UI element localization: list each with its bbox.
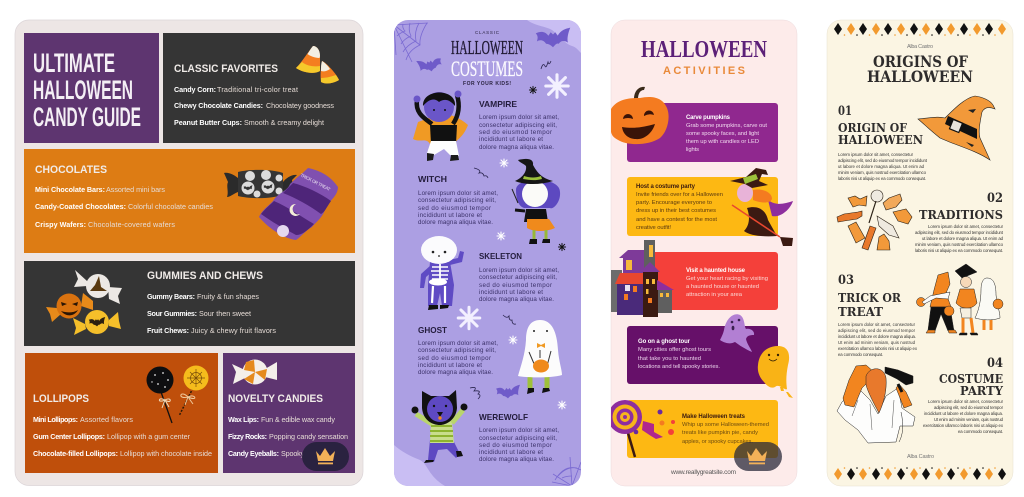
section 04: PARTY <box>960 383 1004 398</box>
section 03: ea commodo consequat. <box>838 352 883 357</box>
entry: ghost text: sed do eiusmod tempor <box>418 355 491 362</box>
section 01: laboris nisi ut aliquip ex ea commodo consequat. <box>838 176 926 181</box>
section: gummies and chews: Fruity & fun shapes <box>197 292 259 301</box>
section: chocolates: Crispy Wafers: <box>35 220 86 229</box>
section: lollipops: Chocolate-filled Lollipops: <box>33 449 118 458</box>
section 04: 04 <box>987 356 1003 371</box>
section: lollipops: Lollipop with a gum center <box>107 432 191 441</box>
entry: witch text: Lorem ipsum dolor sit amet, <box>418 190 498 197</box>
section 04: exercitation ullamco laboris nisi ut aliquip ex <box>923 423 1004 428</box>
entry: ghost text: consectetur adipiscing elit, <box>418 347 496 354</box>
icon: yellow ghost <box>758 346 793 398</box>
section: chocolates: Assorted mini bars <box>106 185 165 194</box>
heading: HALLOWEEN <box>641 37 768 63</box>
section: chocolates: CHOCOLATES <box>35 164 107 176</box>
activity: haunted house: Visit a haunted house <box>686 268 746 274</box>
decorative blobs <box>394 20 581 486</box>
activity: haunted house: attraction in your area <box>686 292 743 298</box>
entry: werewolf text: Lorem ipsum dolor sit amet, <box>479 427 559 434</box>
activity: halloween treats <box>608 400 778 458</box>
section: classic favorites: Candy Corn: <box>174 85 216 94</box>
section 03: incididunt ut labore et dolore magna aliqua. <box>838 334 916 339</box>
section 03: TRICK OR <box>838 290 902 305</box>
entry: witch text: sed do eiusmod tempor <box>418 205 491 212</box>
heading: COSTUMES <box>451 56 523 81</box>
section: lollipops: Assorted flavors <box>80 415 133 424</box>
section 02: laboris nisi ut aliquip ex ea commodo consequat. <box>915 248 1003 253</box>
section: chocolates: Candy-Coated Chocolates: <box>35 202 126 211</box>
heading: ACTIVITIES <box>663 65 745 77</box>
entry: vampire text: sed do eiusmod tempor <box>479 129 552 136</box>
icon: lollipops <box>146 366 208 423</box>
illustration: ghost <box>518 320 562 394</box>
activity: carve pumpkins: lights <box>686 147 699 153</box>
section: lollipops: Lollipop with chocolate inside <box>120 449 212 458</box>
activity: ghost tour: Go on a ghost tour <box>638 339 691 345</box>
entry: vampire text: consectetur adipiscing elit, <box>479 122 557 129</box>
entry: witch text: WITCH <box>418 174 447 184</box>
section 04: incididunt ut labore et dolore magna aliqua. <box>924 411 1003 416</box>
activity: costume party <box>627 168 793 246</box>
title block: HALLOWEEN <box>33 75 133 105</box>
heading <box>641 37 768 77</box>
section: classic favorites: Smooth & creamy delight <box>244 118 324 127</box>
panel: halloween activities <box>608 20 797 486</box>
heading <box>451 30 523 87</box>
section 01: HALLOWEEN <box>838 132 923 147</box>
badge: crown <box>302 442 349 471</box>
entry: werewolf text: sed do eiusmod tempor <box>479 442 552 449</box>
entry: ghost text <box>418 325 498 376</box>
entry: witch text: consectetur adipiscing elit, <box>418 197 496 204</box>
entry: skeleton text <box>479 251 559 303</box>
section 03: 03 <box>838 273 854 288</box>
illustration: witch <box>512 159 560 244</box>
activity: ghost tour: locations and tell spooky stories. <box>638 364 720 370</box>
section 03: adipiscing elit, sed do eiusmod tempor <box>838 328 916 333</box>
activity: carve pumpkins: Carve pumpkins <box>686 115 731 121</box>
panel: halloween costumes <box>394 20 581 486</box>
title block: CANDY GUIDE <box>33 102 141 132</box>
section: novelty candies: Wax Lips: <box>228 415 259 424</box>
activity: ghost tour: that take you to haunted <box>638 356 701 362</box>
section 03: Lorem ipsum dolor sit amet, consectetur <box>838 322 916 327</box>
heading: CLASSIC <box>475 30 500 35</box>
illustration: vampire <box>413 90 468 161</box>
section: gummies and chews: Sour Gummies: <box>147 309 197 318</box>
icon: witch hat <box>918 96 995 160</box>
activity: costume party: Invite friends over for a Halloween <box>636 192 723 198</box>
icon: lollipop and sweets <box>608 400 675 457</box>
icon: spider web top <box>394 23 428 62</box>
heading: FOR YOUR KIDS! <box>463 81 511 87</box>
section 01: 01 <box>838 104 852 119</box>
activity: carve pumpkins: some spooky faces, and light <box>686 131 759 137</box>
section: novelty candies: Popping candy sensation <box>269 432 348 441</box>
activity: costume party: Host a costume party <box>636 184 696 190</box>
activity: costume party: party. Encourage everyone to <box>636 200 712 206</box>
panel: ultimate halloween candy guide <box>15 20 363 486</box>
activity: halloween treats: Make Halloween treats <box>682 414 746 420</box>
entry: skeleton text: dolore magna aliqua vitae. <box>479 296 554 303</box>
section: classic favorites: CLASSIC FAVORITES <box>174 63 278 75</box>
entry: werewolf text: WEREWOLF <box>479 412 528 422</box>
activity: carve pumpkins <box>611 87 778 162</box>
entry: vampire text: VAMPIRE <box>479 99 517 109</box>
section: novelty candies: Spooky & fun treats <box>281 449 341 458</box>
section: classic favorites: Traditional tri-color treat <box>217 85 298 94</box>
section: chocolates <box>24 149 355 253</box>
section: chocolates: Colorful chocolate candies <box>128 202 213 211</box>
panel: origins of halloween <box>827 20 1013 486</box>
icon: purple striped candy <box>259 168 338 240</box>
section 02: 02 <box>987 191 1003 206</box>
icon: spider web bottom <box>552 457 581 486</box>
section: gummies and chews: GUMMIES AND CHEWS <box>147 270 263 282</box>
section 01: adipiscing elit, sed do eiusmod tempor incididunt <box>838 158 928 163</box>
pattern: top diamonds <box>834 23 1006 36</box>
badge: crown <box>734 442 782 471</box>
section: chocolates: Mini Chocolate Bars: <box>35 185 105 194</box>
entry: vampire text: incididunt ut labore et <box>479 136 543 143</box>
section 03: exercitation ullamco laboris nisi ut aliquip ex <box>838 346 918 351</box>
section 01: ORIGIN OF <box>838 120 907 135</box>
section: classic favorites: Peanut Butter Cups: <box>174 118 242 127</box>
entry: skeleton text: consectetur adipiscing elit, <box>479 274 557 281</box>
icon: swirl candy <box>232 360 277 384</box>
section 02 <box>915 191 1004 253</box>
heading: HALLOWEEN <box>451 37 523 59</box>
decorations: stars and squiggles <box>458 61 568 409</box>
section: novelty candies: Candy Eyeballs: <box>228 449 279 458</box>
activity: costume party: and have a contest for the most <box>636 217 717 223</box>
activity: costume party: creative outfit! <box>636 225 671 231</box>
activity: carve pumpkins: Grab some pumpkins, carve out <box>686 123 767 129</box>
section: classic favorites: Chewy Chocolate Candies: <box>174 101 263 110</box>
section 01 <box>838 104 928 181</box>
section 01: minim veniam, quis nostrud exercitation ullamco <box>838 170 927 175</box>
illustration: man with hair dryer <box>837 365 915 443</box>
entry: skeleton text: sed do eiusmod tempor <box>479 282 552 289</box>
section 04: ea commodo consequat. <box>958 429 1003 434</box>
icon: pumpkin <box>611 87 669 144</box>
entry: vampire text <box>479 99 559 151</box>
entry: werewolf text: dolore magna aliqua vitae. <box>479 456 554 463</box>
section: gummies and chews: Juicy & chewy fruit flavors <box>191 326 276 335</box>
activity: costume party: dress up in their best costumes <box>636 208 716 214</box>
section 04: Lorem ipsum dolor sit amet, consectetur <box>928 399 1004 404</box>
pattern: bottom diamonds <box>834 467 1006 480</box>
heading <box>867 52 973 86</box>
section 02: adipiscing elit, sed do eiusmod tempor incididunt <box>915 230 1004 235</box>
entry: skeleton text: incididunt ut labore et <box>479 289 543 296</box>
icon: bats <box>416 28 570 398</box>
section 02: minim veniam, quis nostrud exercitation ullamco <box>915 242 1004 247</box>
icon: candy pile <box>837 190 912 250</box>
entry: vampire text: dolore magna aliqua vitae. <box>479 144 554 151</box>
section: lollipops: Gum Center Lollipops: <box>33 432 105 441</box>
entry: werewolf text <box>479 412 559 463</box>
activity: haunted house: a haunted house or haunted <box>686 284 759 290</box>
illustration: werewolf <box>412 390 468 463</box>
entry: ghost text: incididunt ut labore et <box>418 362 482 369</box>
section 02: TRADITIONS <box>919 207 1003 222</box>
entry: vampire text: Lorem ipsum dolor sit amet, <box>479 114 559 121</box>
section: gummies and chews <box>24 261 355 346</box>
entry: werewolf text: incididunt ut labore et <box>479 449 543 456</box>
activity: haunted house <box>611 240 778 317</box>
section: classic favorites: Chocolatey goodness <box>266 101 334 110</box>
activity: haunted house: Get your heart racing by visiting <box>686 276 768 282</box>
entry: ghost text: Lorem ipsum dolor sit amet, <box>418 340 498 347</box>
heading: HALLOWEEN <box>867 67 973 86</box>
activity: halloween treats: apples, or spooky cupcakes. <box>682 439 753 445</box>
icon: three halloween candies <box>46 270 122 335</box>
section: gummies and chews: Fruit Chews: <box>147 326 189 335</box>
activity: carve pumpkins: them up with candles or LED <box>686 139 759 145</box>
section 02: ut labore et dolore magna aliqua. Ut enim ad <box>922 236 1004 241</box>
entry: witch text: dolore magna aliqua vitae. <box>418 219 493 226</box>
section: gummies and chews: Sour then sweet <box>199 309 251 318</box>
icon: haunted house <box>611 240 674 317</box>
section 04: COSTUME <box>939 371 1003 386</box>
icon: candy corn <box>296 46 339 83</box>
entry: ghost text: dolore magna aliqua vitae. <box>418 369 493 376</box>
icon: flying witch <box>730 168 793 246</box>
activity: halloween treats: treats like pumpkin pie, candy <box>682 430 758 436</box>
section: novelty candies <box>223 353 355 473</box>
author: Alba Castro <box>907 44 933 50</box>
title block: ULTIMATE <box>33 48 115 78</box>
icon: purple striped candy: TRICK OR TREAT <box>300 172 331 192</box>
section: lollipops: LOLLIPOPS <box>33 393 89 405</box>
section: lollipops <box>25 353 218 473</box>
section 01: Lorem ipsum dolor sit amet, consectetur <box>838 152 914 157</box>
section 04: Ut enim ad minim veniam, quis nostrud <box>934 417 1004 422</box>
section: gummies and chews: Gummy Bears: <box>147 292 195 301</box>
entry: werewolf text: consectetur adipiscing elit, <box>479 435 557 442</box>
section: novelty candies: NOVELTY CANDIES <box>228 393 323 405</box>
section 02: Lorem ipsum dolor sit amet, consectetur <box>928 224 1004 229</box>
entry: ghost text: GHOST <box>418 325 448 335</box>
section 04 <box>923 356 1004 434</box>
activity: ghost tour <box>627 314 793 398</box>
section 04: adipiscing elit, sed do eiusmod tempor <box>934 405 1004 410</box>
section: classic favorites <box>163 33 355 143</box>
section 03 <box>838 273 918 357</box>
author: Alba Castro <box>907 454 934 460</box>
icon: wrapped bat candy <box>224 170 297 198</box>
section: novelty candies: Fizzy Rocks: <box>228 432 267 441</box>
illustration: skeleton <box>420 236 464 310</box>
entry: witch text <box>418 174 498 226</box>
website: www.reallygreatsite.com <box>670 469 736 476</box>
section: novelty candies: Fun & edible wax candy <box>261 415 335 424</box>
section 03: TREAT <box>838 304 884 319</box>
activity: halloween treats: Whip up some Halloween-themed <box>682 422 769 428</box>
entry: skeleton text: Lorem ipsum dolor sit amet, <box>479 267 559 274</box>
illustration: trick or treaters <box>916 264 1003 335</box>
title block <box>24 33 159 143</box>
heading: ORIGINS OF <box>873 52 969 71</box>
section 01: ut labore et dolore magna aliqua. Ut enim ad <box>838 164 925 169</box>
section: lollipops: Mini Lollipops: <box>33 415 78 424</box>
activity: ghost tour: Many cities offer ghost tours <box>638 347 711 353</box>
icon: purple ghost <box>720 314 754 352</box>
section: chocolates: Chocolate-covered wafers <box>88 220 175 229</box>
section 03: Ut enim ad minim veniam, quis nostrud <box>838 340 916 345</box>
entry: skeleton text: SKELETON <box>479 251 522 261</box>
entry: witch text: incididunt ut labore et <box>418 212 482 219</box>
